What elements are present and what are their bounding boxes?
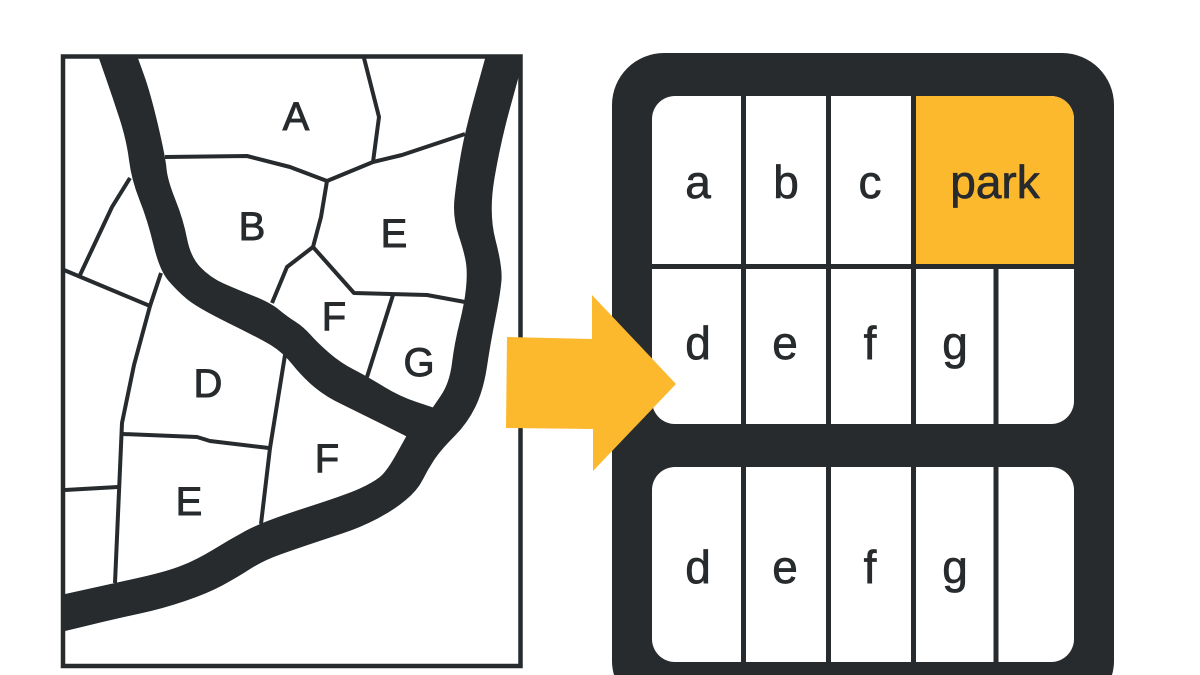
upper grid block xyxy=(652,96,1074,424)
cell label d: d xyxy=(685,317,711,369)
cell label g: g xyxy=(942,541,968,593)
cell label e: e xyxy=(772,541,798,593)
cell label f: f xyxy=(864,317,877,369)
map label A: A xyxy=(283,95,310,139)
cell label c: c xyxy=(858,156,882,208)
map label G: G xyxy=(403,341,435,385)
map roads xyxy=(63,57,520,631)
map label E upper: E xyxy=(381,212,407,256)
cell label park: park xyxy=(950,156,1041,208)
cell label a: a xyxy=(685,156,711,208)
arrow xyxy=(506,295,676,471)
upper grid lines xyxy=(652,96,1074,424)
cell label f: f xyxy=(864,541,877,593)
cell label g: g xyxy=(942,317,968,369)
lower grid block xyxy=(652,467,1074,662)
map label E lower: E xyxy=(176,480,202,524)
map label F upper: F xyxy=(322,295,346,339)
map label F lower: F xyxy=(315,437,339,481)
panel: grid device xyxy=(612,53,1114,675)
lower grid lines xyxy=(744,467,996,662)
cell label b: b xyxy=(773,156,799,208)
map label B: B xyxy=(239,205,265,249)
map parcel borders xyxy=(64,58,465,583)
map label D: D xyxy=(194,362,222,406)
cell label e: e xyxy=(772,317,798,369)
panel: map xyxy=(63,56,520,666)
cell label d: d xyxy=(685,541,711,593)
highlighted park cell xyxy=(915,96,1074,265)
